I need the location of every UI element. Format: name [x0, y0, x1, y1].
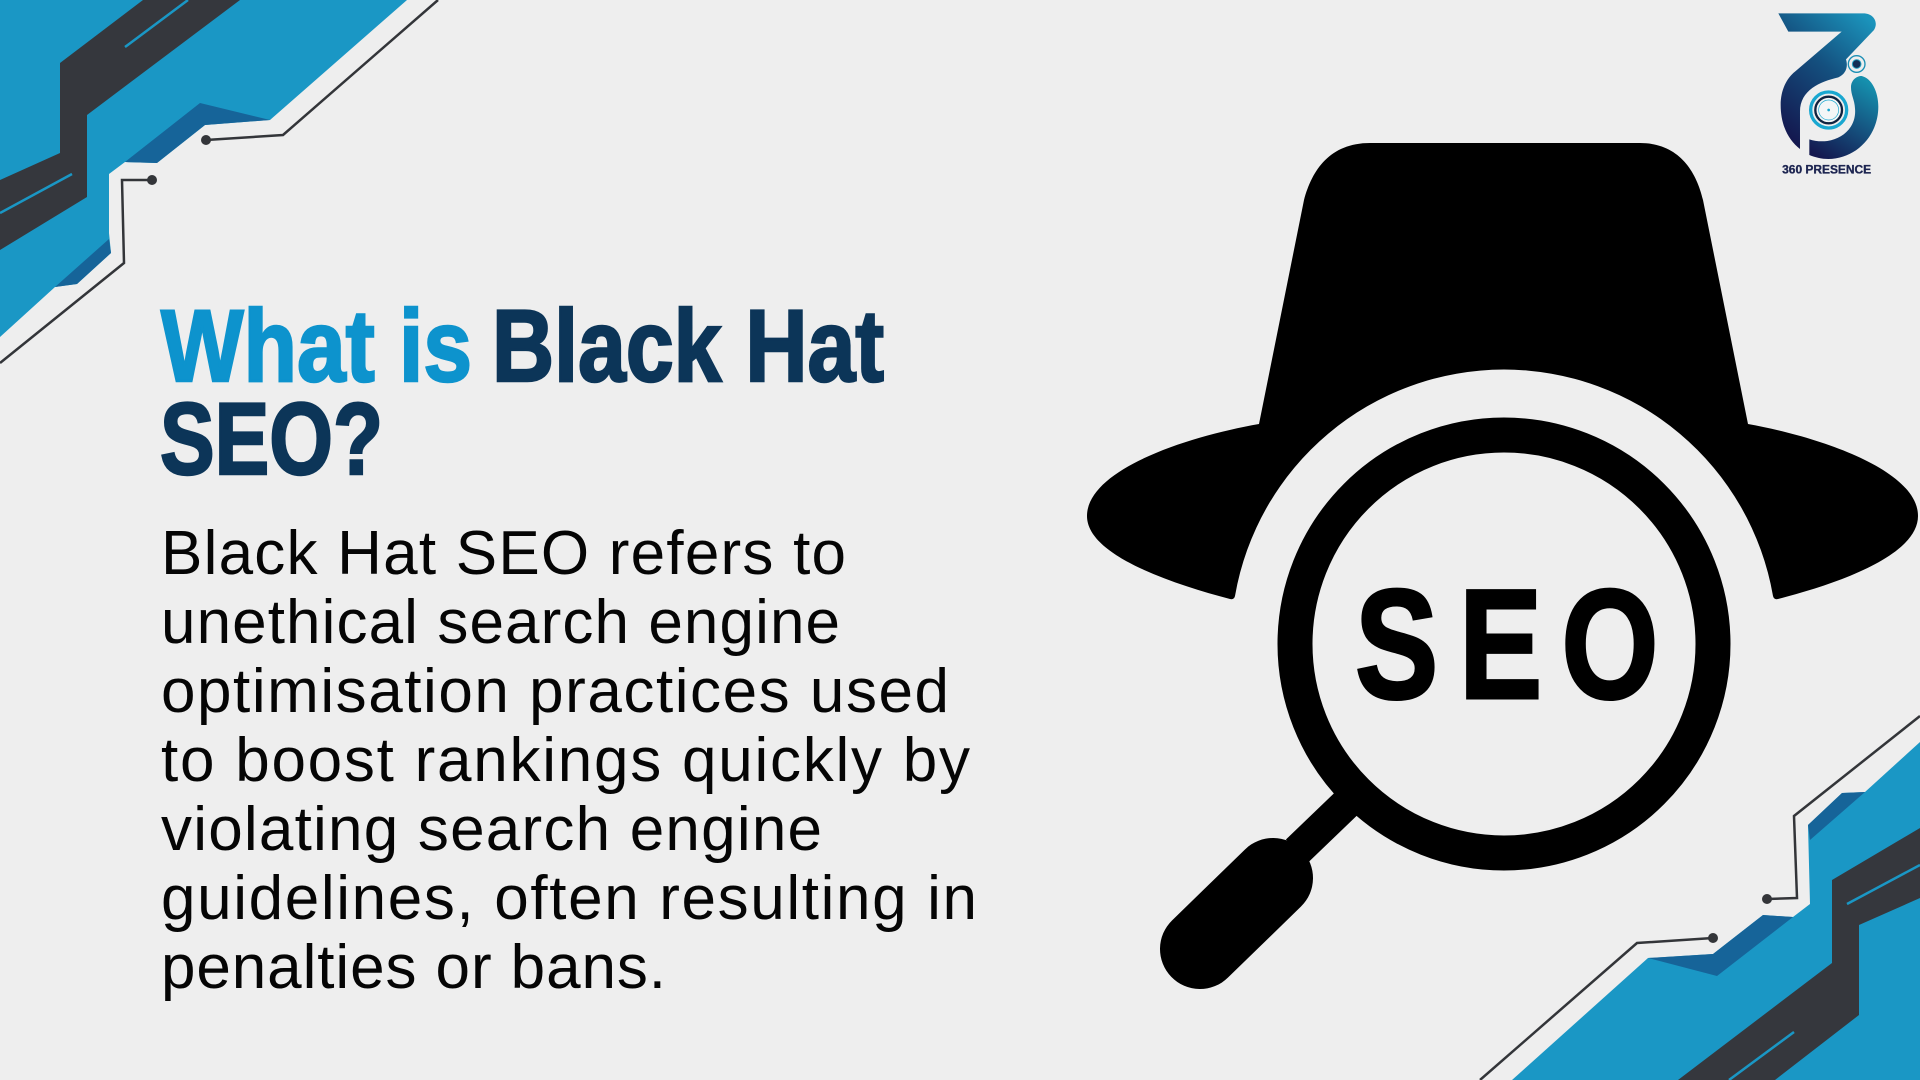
body text: Black Hat SEO refers to [161, 519, 846, 588]
body text: guidelines, often resulting in [161, 864, 977, 933]
hat silhouette [1087, 143, 1918, 599]
decoration: top-left corner [0, 0, 438, 363]
icon: black hat with SEO magnifying glass [1087, 143, 1918, 949]
body text: penalties or bans. [161, 933, 666, 1002]
logo mark: small lens [1848, 56, 1865, 72]
body text: to boost rankings quickly by [161, 726, 970, 795]
logo mark: right bowl [1809, 76, 1878, 159]
magnifying glass [1200, 435, 1713, 949]
title: What is [161, 289, 472, 403]
body text: unethical search engine [161, 588, 840, 657]
SEO label: SEO [1355, 557, 1658, 731]
body text [161, 519, 977, 1002]
title: SEO? [160, 382, 383, 496]
decoration: bottom-right corner [1480, 716, 1920, 1080]
logo mark: centre lens [1811, 92, 1847, 128]
logo wordmark: 360 PRESENCE [1782, 162, 1871, 176]
logo: 360 Presence [1778, 13, 1878, 176]
body text: optimisation practices used [161, 657, 949, 726]
logo mark: left seven stroke [1778, 13, 1876, 149]
body text: violating search engine [161, 795, 822, 864]
title [160, 289, 884, 496]
title: Black Hat [492, 289, 884, 403]
